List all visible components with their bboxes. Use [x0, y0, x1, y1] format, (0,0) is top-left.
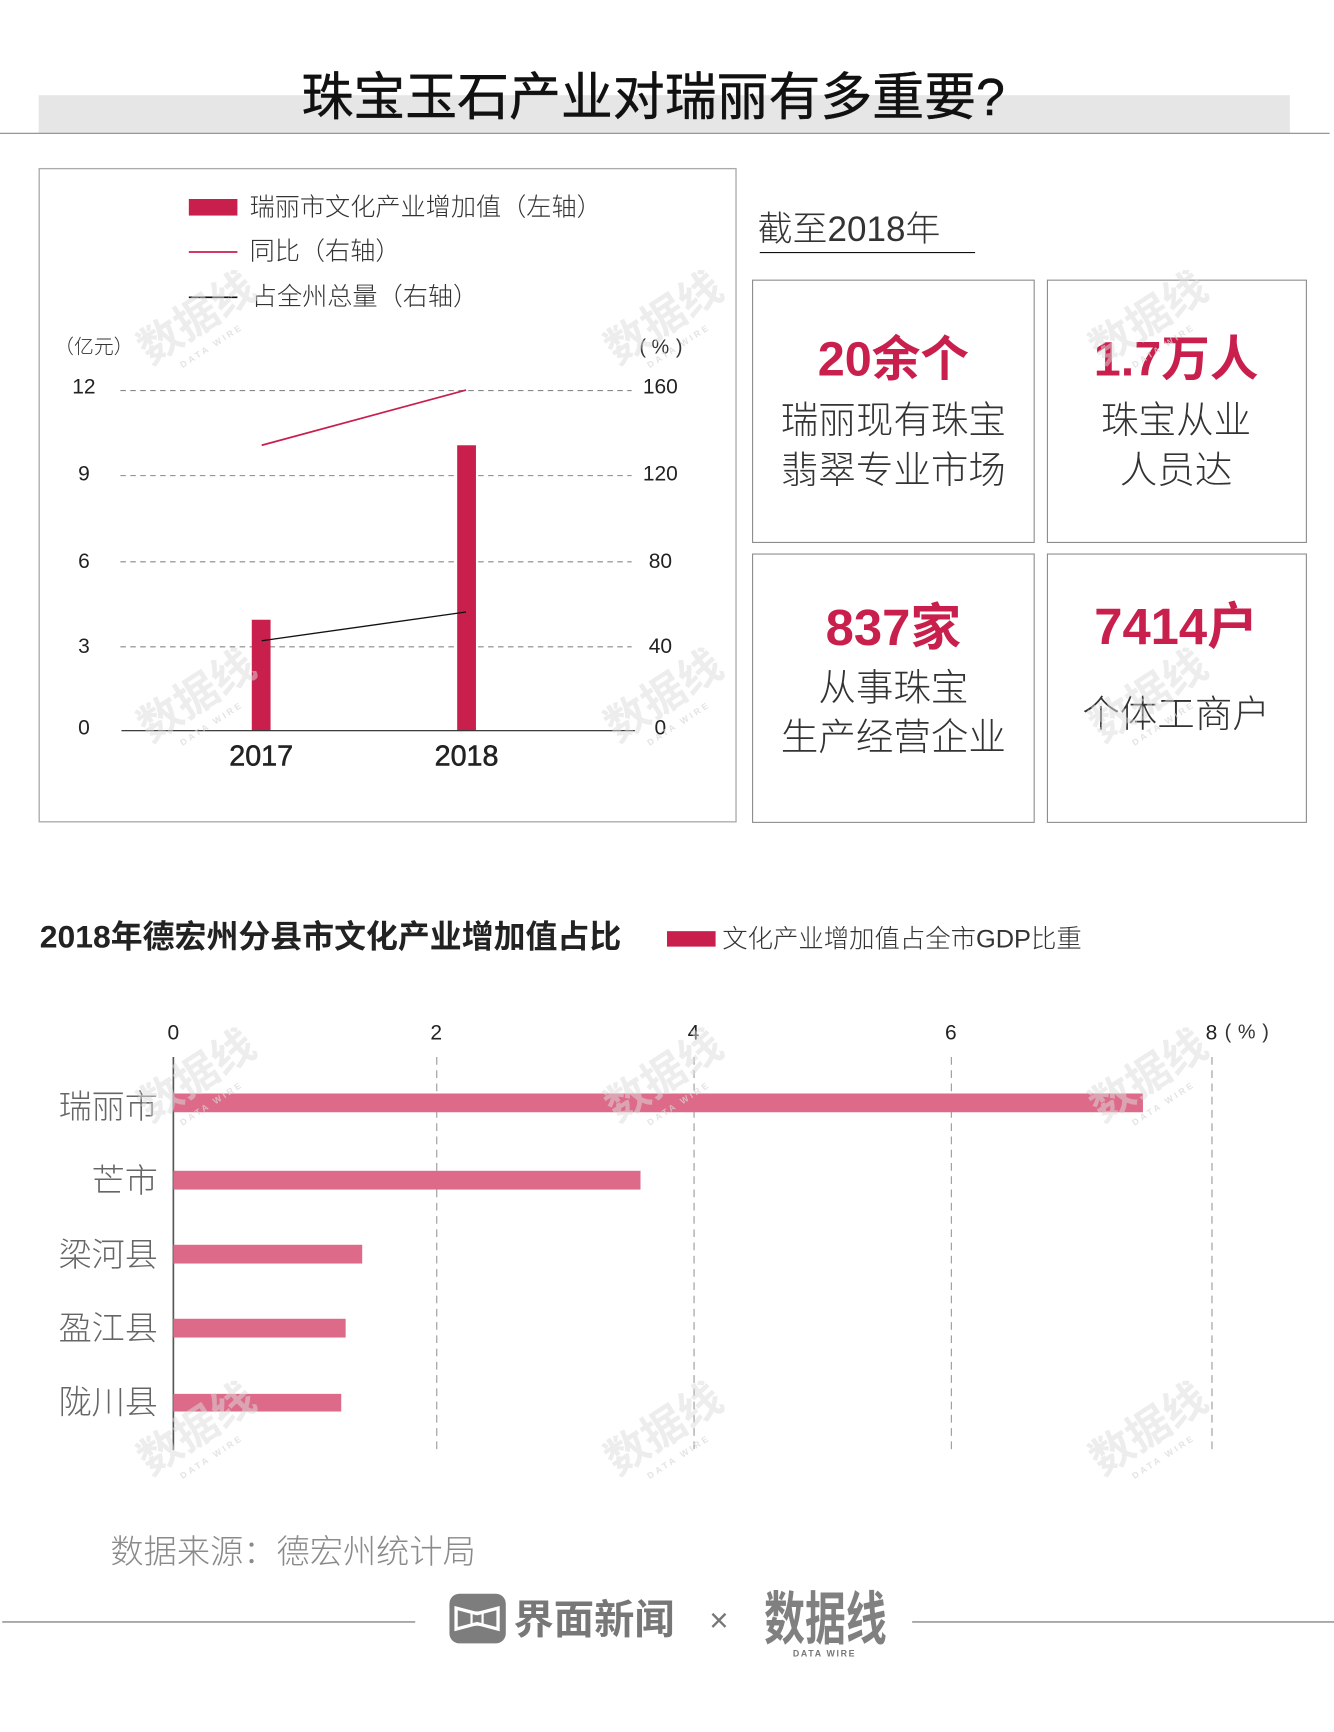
year labels: 2017 [229, 741, 293, 773]
bars [252, 445, 476, 730]
chart legend: 同比（右轴） [250, 238, 401, 266]
card: households: 个体工商户 [1082, 693, 1270, 735]
watermark: 数据线 [597, 263, 731, 374]
watermark: 数据线 [130, 263, 264, 374]
x axis numbers [168, 1021, 1269, 1044]
watermark: DATA WIRE [178, 1079, 245, 1128]
card: enterprises [753, 554, 1034, 822]
title: 珠宝玉石产业对瑞丽有多重要? [301, 68, 1005, 126]
chart legend [189, 194, 602, 311]
bar chart: culture industry share of GDP [59, 1021, 1269, 1450]
card: markets [753, 280, 1034, 542]
watermark: 数据线 [597, 1021, 731, 1131]
x axis numbers: % [1238, 1021, 1256, 1043]
chart legend: 占全州总量（右轴） [252, 283, 478, 311]
bars [173, 1093, 1143, 1412]
right axis numbers: 80 [649, 550, 672, 573]
card: employees [1047, 280, 1306, 542]
brand: jiemian news: 界面新闻 [514, 1597, 675, 1642]
grid lines [120, 391, 632, 647]
vertical grid [437, 1057, 1212, 1450]
watermark: DATA WIRE [645, 699, 712, 748]
card: enterprises: 生产经营企业 [781, 716, 1006, 758]
card: enterprises: 从事珠宝 [818, 666, 968, 708]
watermark: 数据线 [1082, 1021, 1216, 1131]
left axis numbers: 3 [78, 635, 90, 658]
left axis unit: （亿元） [54, 337, 134, 359]
times sign: × [709, 1602, 729, 1639]
card: enterprises: 837家 [826, 599, 961, 656]
watermark: 数据线 [130, 641, 264, 752]
category labels: 芒市 [92, 1163, 158, 1200]
x axis numbers: 2 [430, 1021, 442, 1044]
watermark: 数据线 [130, 1021, 264, 1131]
footer rule left [2, 1621, 415, 1623]
bar chart legend: 文化产业增加值占全市GDP比重 [722, 926, 1082, 954]
card: markets: 瑞丽现有珠宝 [781, 399, 1006, 441]
source: 数据来源：德宏州统计局 [110, 1534, 476, 1571]
chart legend: 瑞丽市文化产业增加值（左轴） [250, 194, 602, 222]
watermark: 数据线 [1082, 641, 1216, 752]
right axis numbers: 160 [643, 375, 678, 398]
right axis numbers: 40 [649, 635, 672, 658]
footer rule right [912, 1621, 1334, 1623]
x axis numbers: 6 [945, 1021, 957, 1044]
card: households: 7414户 [1094, 598, 1258, 655]
category labels: 梁河县 [59, 1237, 158, 1274]
panel: combo chart [39, 169, 736, 822]
watermark: DATA WIRE [1130, 1433, 1197, 1481]
icon: jiemian logo [449, 1594, 506, 1643]
right axis unit: ( [639, 337, 646, 359]
right axis unit: % [652, 337, 669, 359]
year labels [229, 741, 498, 773]
watermark: DATA WIRE [1130, 699, 1197, 748]
card: markets: 翡翠专业市场 [781, 449, 1006, 491]
brand: data wire: DATA WIRE [793, 1649, 856, 1659]
watermark: DATA WIRE [1130, 1079, 1197, 1128]
watermark: DATA WIRE [645, 1079, 712, 1128]
title band [0, 95, 1330, 133]
watermark: 数据线 [130, 1374, 264, 1485]
line: year on year [262, 390, 466, 445]
right axis numbers [643, 375, 678, 740]
watermark: DATA WIRE [178, 699, 245, 748]
watermark: 数据线 [597, 641, 731, 752]
watermark: DATA WIRE [178, 322, 245, 370]
watermark: 数据线 [1082, 263, 1216, 374]
right axis unit [639, 337, 682, 359]
left axis numbers [72, 375, 96, 740]
x axis numbers: ) [1262, 1021, 1269, 1043]
bar chart heading: 2018年德宏州分县市文化产业增加值占比 [40, 919, 621, 955]
left axis numbers: 12 [72, 375, 96, 398]
right axis numbers: 120 [643, 463, 678, 486]
x axis numbers: ( [1225, 1021, 1232, 1043]
left axis numbers: 0 [78, 717, 90, 740]
watermark: 数据线 [1082, 1374, 1216, 1485]
watermark: DATA WIRE [645, 322, 712, 370]
y axis [172, 1057, 174, 1450]
x axis numbers: 8 [1206, 1021, 1217, 1044]
left axis numbers: 9 [78, 463, 90, 486]
card: employees: 珠宝从业 [1101, 399, 1251, 441]
watermark: DATA WIRE [645, 1433, 712, 1481]
brand: data wire: 数据线 [764, 1587, 887, 1652]
card: markets: 20余个 [818, 333, 969, 387]
card: households [1047, 554, 1306, 822]
category labels: 盈江县 [59, 1311, 158, 1348]
line: share of prefecture [262, 612, 466, 641]
card: employees: 1.7万人 [1094, 333, 1258, 387]
watermark: 数据线 [597, 1374, 731, 1485]
subtitle: as of 2018: 截至2018年 [758, 210, 940, 249]
category labels: 瑞丽市 [59, 1089, 158, 1126]
right axis unit: ) [676, 337, 682, 359]
year labels: 2018 [435, 741, 498, 773]
baseline [121, 730, 635, 732]
right axis numbers: 0 [655, 717, 666, 740]
watermark: DATA WIRE [178, 1433, 245, 1481]
category labels: 陇川县 [59, 1385, 158, 1422]
category labels [59, 1089, 158, 1422]
card: employees: 人员达 [1120, 449, 1232, 491]
watermark: DATA WIRE [1130, 322, 1197, 370]
x axis numbers: 4 [688, 1021, 700, 1044]
left axis numbers: 6 [78, 550, 90, 573]
x axis numbers: 0 [168, 1021, 179, 1044]
